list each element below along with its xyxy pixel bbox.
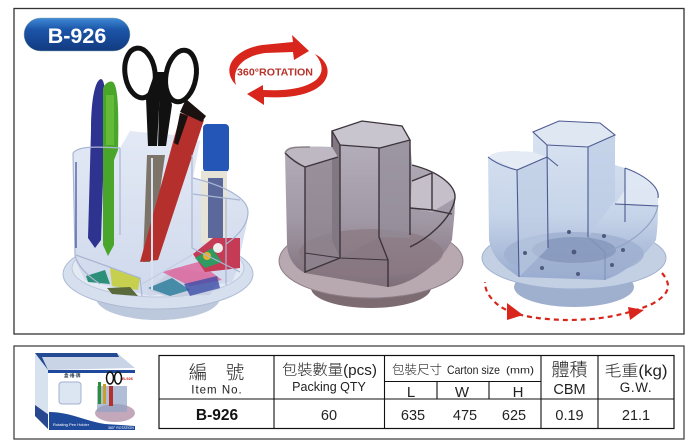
pens xyxy=(88,79,118,256)
scissors xyxy=(122,46,200,262)
column: carton size: (mm) xyxy=(506,364,534,376)
silhouette of body xyxy=(488,121,658,280)
column: item number: B-926 xyxy=(196,407,238,424)
column: item number: 編 號 xyxy=(189,362,244,383)
panel: packing specification xyxy=(14,346,684,439)
image: retail carton box: B-926 xyxy=(122,376,134,381)
column: carton size: 635 xyxy=(401,408,425,424)
image: retail carton box: 盒·椿·牌 xyxy=(64,372,81,379)
edges xyxy=(488,121,658,280)
image: retail carton box xyxy=(35,353,135,430)
icon: 360 degree rotation arrows xyxy=(229,35,328,105)
column: carton size: W xyxy=(455,384,470,401)
column: carton size: 包裝尺寸 xyxy=(392,363,442,377)
photo: clear organizer filled with stationery xyxy=(63,46,253,320)
column: gross weight: 毛重(kg) xyxy=(604,362,668,380)
column: packing quantity: Packing QTY xyxy=(292,380,366,394)
base xyxy=(63,239,253,320)
base xyxy=(482,227,666,307)
column: packing quantity: 60 xyxy=(321,408,337,424)
table: packing specifications xyxy=(159,356,674,428)
column: volume xyxy=(552,360,588,424)
colored clips and pins xyxy=(86,238,240,296)
red marker xyxy=(140,99,206,262)
photo: clear blue organizer xyxy=(482,121,666,307)
image: retail carton box: Rotating Pen Holder xyxy=(53,422,90,427)
edges xyxy=(285,121,455,287)
column: item number: Item No. xyxy=(191,384,243,396)
column: carton size xyxy=(392,363,534,424)
photo: smoky grey organizer xyxy=(279,121,463,308)
column: packing quantity xyxy=(282,362,377,424)
badge: model number B-926: B-926 xyxy=(48,24,106,48)
image: retail carton box: 360° ROTATION xyxy=(108,426,134,430)
column: carton size: L xyxy=(407,384,415,401)
column: carton size: H xyxy=(513,384,523,401)
column: volume: CBM xyxy=(553,382,586,398)
column: gross weight xyxy=(604,362,668,424)
icon: 360 degree rotation arrows: 360°ROTATION xyxy=(237,66,313,78)
base xyxy=(279,224,463,308)
panel: product photos xyxy=(14,8,684,334)
column: carton size: 625 xyxy=(502,408,526,424)
silhouette of body xyxy=(73,131,248,296)
column: volume: 體積 xyxy=(552,360,588,380)
silhouette of body xyxy=(285,121,455,287)
rivets xyxy=(523,230,625,276)
walls xyxy=(285,121,455,287)
column: gross weight: G.W. xyxy=(620,380,652,395)
badge: model number B-926 xyxy=(24,18,130,51)
column: carton size: Carton size xyxy=(447,363,500,377)
glue bottle xyxy=(201,124,229,243)
column: carton size: 475 xyxy=(453,408,477,424)
walls xyxy=(488,121,658,277)
arrow: dashed red rotation arrow xyxy=(485,273,668,320)
column: gross weight: 21.1 xyxy=(622,408,650,424)
column: item number xyxy=(189,362,244,424)
column: volume: 0.19 xyxy=(555,408,584,424)
column: packing quantity: 包裝數量(pcs) xyxy=(282,362,377,379)
clear walls overlay xyxy=(73,147,248,296)
